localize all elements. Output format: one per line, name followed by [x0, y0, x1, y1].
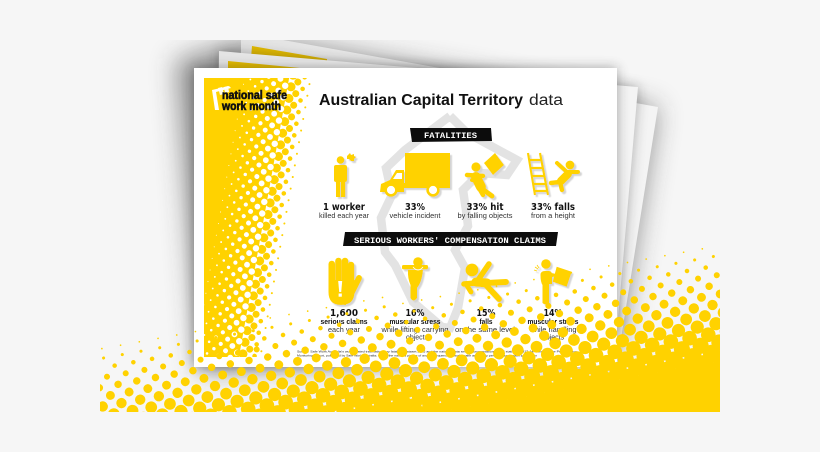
footnote	[297, 350, 577, 358]
stat: 14% muscular stress: while handling	[528, 325, 576, 334]
footnote: Monitoring Report, published by Safe Work Australia; shows the national picture of any consequence of work health and safety performance in each jurisdiction	[297, 354, 537, 358]
stat: 33% vehicle incident: 33%	[405, 202, 425, 213]
banner: fatalities: FATALITIES	[424, 131, 477, 141]
stat: 1,600 serious claims: 1,600	[330, 308, 358, 319]
panel: main card	[194, 68, 617, 367]
stat: 1,600 serious claims	[320, 308, 368, 334]
stat: 14% muscular stress: muscular stress	[528, 317, 578, 326]
stat: 33% hit	[458, 202, 513, 220]
stat: 15% falls: on the same level	[455, 325, 515, 334]
icon: ladder and falling person	[528, 153, 578, 195]
title: Australian Capital Territory	[319, 92, 523, 109]
icon: person handling a box	[534, 259, 572, 304]
stat: 1 worker	[319, 202, 370, 220]
stat: 33% falls: 33% falls	[531, 202, 575, 213]
stat: 33% falls: from a height	[531, 211, 575, 220]
icon: raised hand with exclamation mark	[328, 261, 359, 305]
banner: serious workers' compensation claims	[343, 232, 558, 246]
stat: 33% falls	[531, 202, 575, 220]
stat: 14% muscular stress: 14%	[544, 308, 562, 319]
stat: 33% vehicle incident: vehicle incident	[390, 211, 440, 220]
stat: 16% muscular stress	[380, 308, 448, 342]
banner: serious workers' compensation claims: SERIOUS WORKERS' COMPENSATION CLAIMS	[354, 236, 546, 246]
logo: national safe work month	[212, 86, 287, 113]
stat: 1,600 serious claims: each year	[328, 325, 361, 334]
stat: 16% muscular stress: muscular stress	[390, 317, 440, 326]
stat: 14% muscular stress	[528, 308, 578, 342]
logo: national safe work month: national safe	[222, 90, 287, 102]
stacked pages behind the card	[175, 40, 658, 372]
stat: 14% muscular stress: objects	[542, 332, 564, 342]
icon: person carrying load	[402, 257, 428, 300]
icon: person hit by falling box	[467, 153, 504, 196]
stat: 33% vehicle incident	[390, 202, 440, 220]
stat: 16% muscular stress: 16%	[406, 308, 424, 319]
icon: person slipping and falling	[464, 264, 506, 299]
yellow halftone side panel	[204, 78, 310, 357]
footnote: Source: Safe Work Australia's work-related traumatic injury fatalities dataset 2015 and the national data set for compensation-based statistics 2013-14; Comparative Performance	[297, 350, 577, 354]
stat: 15% falls: 15%	[476, 308, 496, 319]
stat: 1 worker: 1 worker	[323, 202, 365, 213]
stat: 16% muscular stress: while lifting, carrying	[380, 325, 448, 334]
stat: 16% muscular stress: objects	[406, 332, 428, 342]
title: data	[529, 92, 563, 109]
logo: national safe work month: work month	[221, 101, 281, 113]
yellow halftone foreground	[100, 248, 720, 412]
banner: fatalities	[410, 128, 492, 142]
stat: 33% hit: by falling objects	[458, 211, 513, 220]
stat: 15% falls	[455, 308, 515, 334]
stat: 1,600 serious claims: serious claims	[320, 317, 368, 326]
map outline of the territory	[381, 116, 517, 328]
icon: truck	[380, 153, 450, 195]
stat: 15% falls: falls	[480, 317, 492, 326]
icon: worker	[334, 153, 356, 197]
stat: 1 worker: killed each year	[319, 211, 370, 220]
stat: 33% hit: 33% hit	[466, 202, 504, 213]
